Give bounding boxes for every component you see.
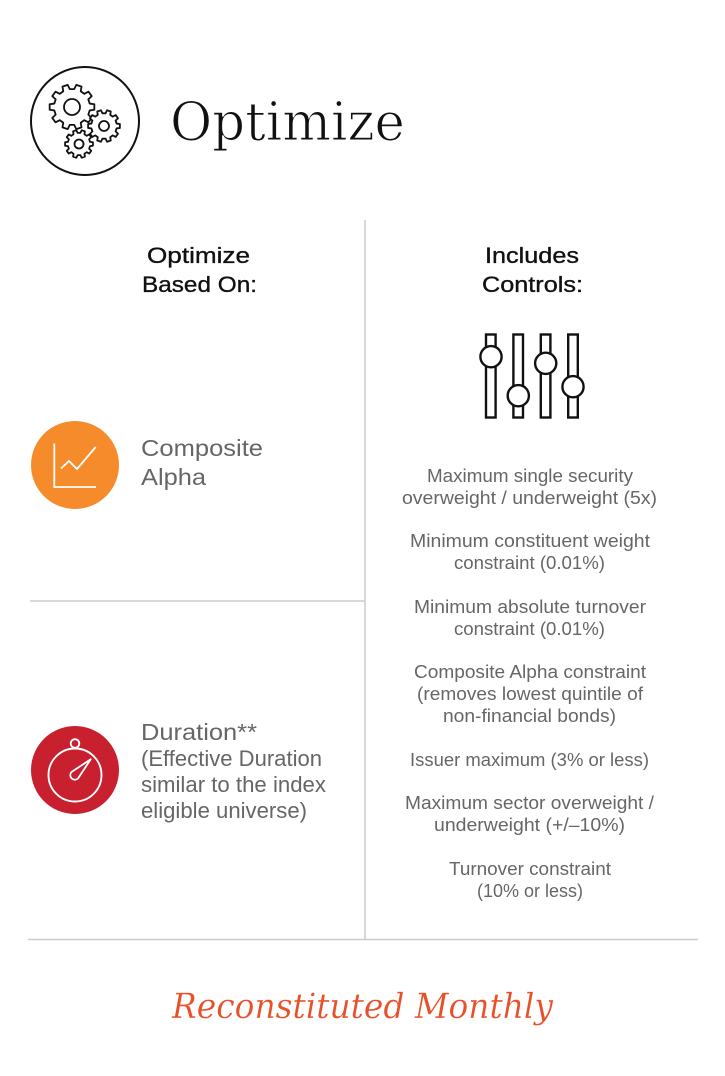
control: absolute turnover: Minimum absolute turnover: [414, 596, 646, 617]
text: controls list: [402, 465, 657, 901]
icon: gears in circle: [31, 67, 139, 175]
label: composite alpha: [141, 435, 263, 490]
footer: reconstituted monthly: Reconstituted Monthly: [171, 987, 554, 1027]
icon: composite alpha chart: [31, 421, 119, 509]
label: duration: [141, 719, 327, 823]
control: sector: underweight (+/–10%): [434, 814, 625, 835]
title: Optimize: [170, 92, 405, 153]
heading: includes controls: [482, 243, 583, 297]
control: single security: Maximum single security: [427, 465, 634, 486]
heading: includes controls: Controls:: [482, 272, 583, 297]
label: composite alpha: Alpha: [141, 464, 207, 490]
control: sector: Maximum sector overweight /: [405, 792, 655, 813]
heading: optimize based on: Optimize: [147, 243, 250, 268]
label: duration: (Effective Duration: [141, 746, 322, 771]
icon: sliders: [480, 334, 584, 418]
control: constituent weight: constraint (0.01%): [454, 552, 605, 573]
control: composite alpha: [414, 661, 646, 726]
control: composite alpha: non-financial bonds): [443, 705, 616, 726]
control: constituent weight: Minimum constituent weight: [410, 530, 650, 551]
control: single security: overweight / underweight (5x): [402, 487, 657, 508]
label: duration: Duration**: [141, 719, 257, 745]
control: composite alpha: Composite Alpha constraint: [414, 661, 646, 682]
control: turnover: Turnover constraint: [449, 858, 611, 879]
control: single security: [402, 465, 657, 508]
label: duration: similar to the index: [141, 772, 327, 797]
label: duration: eligible universe): [141, 798, 307, 823]
heading: optimize based on: [142, 243, 257, 297]
control: constituent weight: [410, 530, 650, 573]
control: turnover: [449, 858, 611, 901]
control: composite alpha: (removes lowest quintile of: [417, 683, 644, 704]
control: sector: [405, 792, 655, 835]
control: turnover: (10% or less): [477, 880, 583, 901]
icon: stopwatch: [31, 726, 119, 814]
control: issuer maximum: Issuer maximum (3% or less): [410, 749, 649, 770]
label: composite alpha: Composite: [141, 435, 263, 461]
control: absolute turnover: constraint (0.01%): [454, 618, 605, 639]
heading: includes controls: Includes: [485, 243, 579, 268]
control: absolute turnover: [414, 596, 646, 639]
heading: optimize based on: Based On:: [142, 272, 257, 297]
